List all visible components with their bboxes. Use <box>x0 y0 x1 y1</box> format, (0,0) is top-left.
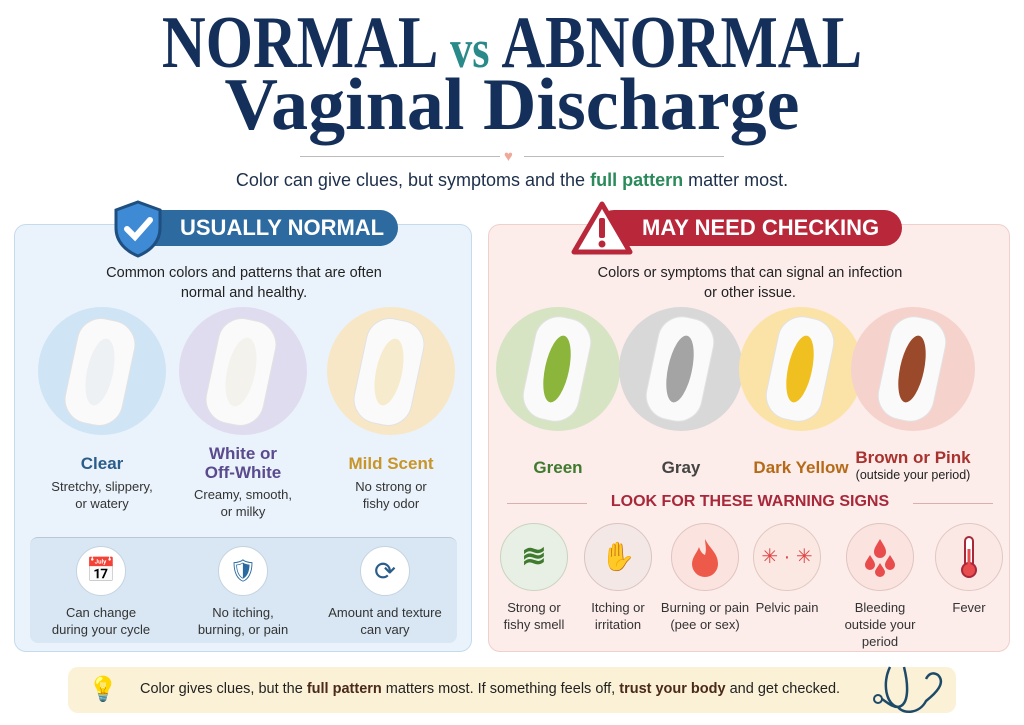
text: normal intro: normal and healthy. <box>181 285 307 301</box>
item: dark yellow <box>739 307 857 477</box>
item: brown or pink <box>851 307 975 482</box>
icon: itching: irritation <box>595 617 641 632</box>
item: white: or milky <box>221 504 265 519</box>
item: clear <box>38 307 166 511</box>
item: clear: Stretchy, slippery, <box>51 479 153 494</box>
item: clear: Clear <box>81 454 123 473</box>
icon: smell: Strong or <box>507 600 561 615</box>
warning icons <box>500 523 1003 649</box>
fact: no itching: 🛡 <box>229 558 257 583</box>
icon: stethoscope <box>873 666 942 713</box>
item: mild scent: Mild Scent <box>348 454 434 473</box>
icon: pelvic pain: ✳ · ✳ <box>761 546 813 568</box>
icon: burning: (pee or sex) <box>670 617 740 632</box>
title: NORMAL vs ABNORMAL <box>162 2 862 84</box>
icon: bleeding: period <box>862 634 898 649</box>
fact: cycle: 📅 <box>86 557 116 584</box>
fact: amount varies: ⟳ <box>374 556 396 586</box>
fact: no itching: burning, or pain <box>198 622 288 637</box>
badge: usually normal: USUALLY NORMAL <box>180 215 384 240</box>
fact: no itching: No itching, <box>212 605 274 620</box>
item: white: Creamy, smooth, <box>194 487 292 502</box>
icon: burning: Burning or pain <box>661 600 749 615</box>
badge: usually normal <box>114 200 398 258</box>
icon: itching: ✋ <box>601 541 635 572</box>
fact: amount varies: Amount and texture <box>328 605 442 620</box>
badge: may need checking <box>572 202 902 254</box>
item: green <box>496 307 620 477</box>
item: clear: or watery <box>75 496 129 511</box>
item: mild scent: fishy odor <box>363 496 419 511</box>
subpanel: normal facts <box>30 537 457 643</box>
fact: cycle: Can change <box>66 605 136 620</box>
icon: fever <box>935 523 1003 615</box>
item: mild scent <box>327 307 455 511</box>
fact: cycle: during your cycle <box>52 622 150 637</box>
icon: itching: Itching or <box>591 600 645 615</box>
icon: pelvic pain: Pelvic pain <box>756 600 818 615</box>
text: abnormal intro <box>598 265 902 301</box>
icon: itching <box>584 523 652 632</box>
icon: lightbulb: 💡 <box>88 676 118 703</box>
icon: burning <box>661 523 749 632</box>
fact: amount varies <box>328 546 442 637</box>
icon: fever: Fever <box>952 600 986 615</box>
icon: smell: ≋ <box>521 540 547 573</box>
text: normal intro: Common colors and patterns that are often <box>106 265 382 281</box>
text: abnormal intro: or other issue. <box>704 285 796 301</box>
icon: bleeding: Bleeding <box>855 600 905 615</box>
heading: warning signs: LOOK FOR THESE WARNING SIGNS <box>611 493 889 510</box>
item: brown or pink: Brown or Pink <box>855 448 971 467</box>
text: normal intro <box>106 265 382 301</box>
icon: bleeding: outside your <box>845 617 915 632</box>
fact: no itching <box>198 546 288 637</box>
badge: may need checking: MAY NEED CHECKING <box>642 215 879 240</box>
icon: pelvic pain <box>753 523 821 615</box>
icon: smell <box>500 523 568 632</box>
callout: bottom banner <box>68 667 956 713</box>
title line 2: Vaginal Discharge <box>225 64 799 146</box>
item: mild scent: No strong or <box>355 479 427 494</box>
panel: may need checking <box>488 224 1010 652</box>
item: gray <box>619 307 741 477</box>
item: gray: Gray <box>662 458 700 477</box>
subtitle: Color can give clues, but symptoms and the full pattern matter most. <box>236 170 788 190</box>
text: abnormal intro: Colors or symptoms that can signal an infection <box>598 265 902 281</box>
item: dark yellow: Dark Yellow <box>753 458 849 477</box>
item: white <box>179 307 307 519</box>
panel: usually normal <box>14 224 472 652</box>
icon: bleeding <box>845 523 916 649</box>
fact: cycle <box>52 546 150 637</box>
item: white: White or <box>209 444 277 463</box>
icon: smell: fishy smell <box>504 617 564 632</box>
text: banner: Color gives clues, but the full pattern matters most. If something feels off, trust your body and get checked. <box>140 681 840 697</box>
item: white: Off-White <box>205 463 281 482</box>
item: brown or pink: (outside your period) <box>856 468 970 482</box>
divider with heart: ♥ <box>504 148 513 165</box>
item: green: Green <box>533 458 583 477</box>
fact: amount varies: can vary <box>360 622 410 637</box>
